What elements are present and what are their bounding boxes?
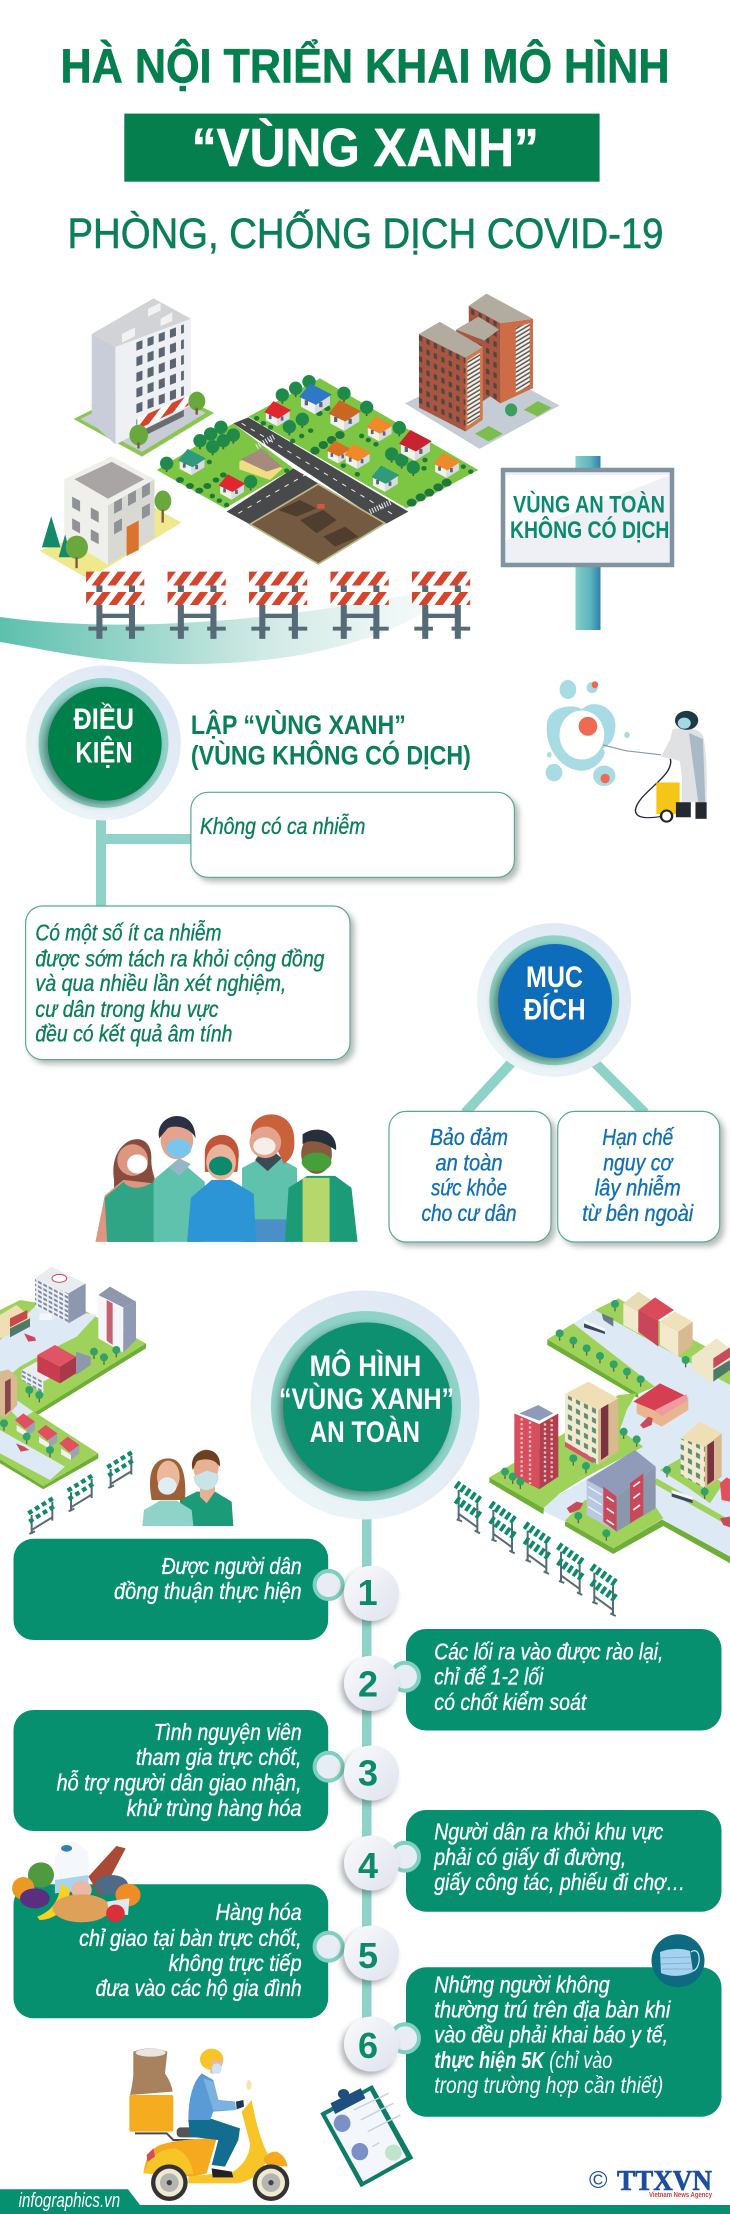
illustration: left isometric city xyxy=(0,1267,146,1489)
footer: infographics.vn xyxy=(0,2189,730,2214)
step 6: trong trường hợp cần thiết) xyxy=(434,2072,663,2098)
panel: few isolated cases: và qua nhiều lần xét nghiệm, xyxy=(35,970,286,996)
step 6: vào đều phải khai báo y tế, xyxy=(434,2022,668,2048)
step 1: 1 xyxy=(358,1572,378,1613)
sign: safe zone: KHÔNG CÓ DỊCH xyxy=(510,516,669,544)
panel: protect resident health: an toàn xyxy=(436,1149,502,1175)
circle: purpose xyxy=(465,923,645,1113)
panel: limit outside infection: từ bên ngoài xyxy=(582,1200,694,1226)
panel: limit outside infection: lây nhiễm xyxy=(595,1174,681,1201)
step 5 xyxy=(14,1884,399,2018)
illustration: lower city scene xyxy=(40,456,470,639)
logo: TTXVN: Vietnam News Agency xyxy=(649,2190,713,2199)
sign: safe zone xyxy=(503,456,672,630)
step 4: Người dân ra khỏi khu vực xyxy=(434,1818,664,1844)
sign: safe zone: VÙNG AN TOÀN xyxy=(513,491,665,519)
icon: left green barriers xyxy=(28,1451,135,1534)
step 3: tham gia trực chốt, xyxy=(136,1744,302,1770)
circle: conditions xyxy=(26,666,181,820)
title xyxy=(60,38,670,258)
icon: grey hotel building xyxy=(74,298,214,457)
circle: purpose: ĐÍCH xyxy=(524,993,586,1027)
step 2: 2 xyxy=(358,1664,378,1705)
icon: brick apartment towers xyxy=(405,294,560,449)
panel: few isolated cases: đều có kết quả âm tính xyxy=(35,1020,232,1046)
icon: delivery rider on yellow scooter xyxy=(129,2048,289,2201)
panel: no infections: Không có ca nhiễm xyxy=(200,812,365,839)
step 6: Những người không xyxy=(434,1972,610,1998)
heading: set up green zone: LẬP “VÙNG XANH” xyxy=(191,709,406,740)
step 4: 4 xyxy=(358,1845,378,1886)
step 2: Các lối ra vào được rào lại, xyxy=(434,1638,663,1664)
step 6: 6 xyxy=(358,2025,378,2066)
step 5: 5 xyxy=(358,1935,378,1976)
icon: beige low-rise building xyxy=(40,456,182,579)
icon: five road barricades xyxy=(86,572,470,639)
step 2 xyxy=(344,1629,722,1730)
panel: protect resident health: cho cư dân xyxy=(422,1200,516,1226)
step 3: Tình nguyện viên xyxy=(154,1719,302,1745)
step 4: phải có giấy đi đường, xyxy=(433,1844,626,1870)
panel: protect resident health xyxy=(389,1111,551,1242)
step 6: thực hiện 5K (chỉ vào xyxy=(434,2047,612,2073)
footer: infographics.vn: infographics.vn xyxy=(19,2190,120,2212)
step 3: khử trùng hàng hóa xyxy=(127,1795,302,1821)
circle: purpose: MỤC xyxy=(526,961,583,994)
circle: conditions: KIỆN xyxy=(75,736,133,770)
circle: safe green-zone model xyxy=(250,1290,480,1520)
panel: few isolated cases: được sớm tách ra khỏi cộng đồng xyxy=(35,945,325,971)
step 5: chỉ giao tại bàn trực chốt, xyxy=(79,1925,302,1951)
logo: TTXVN: © xyxy=(589,2167,608,2194)
icon: disinfection worker spraying virus xyxy=(546,680,707,822)
icon: face mask badge xyxy=(652,1934,704,1987)
step 6: thường trú trên địa bàn khi xyxy=(434,1997,671,2023)
step 2: có chốt kiểm soát xyxy=(434,1689,588,1715)
panel: no infections xyxy=(191,792,514,877)
step 6 xyxy=(344,1967,722,2117)
panel: limit outside infection: Hạn chế xyxy=(602,1124,675,1150)
step 1: đồng thuận thực hiện xyxy=(114,1578,302,1604)
connector: model timeline xyxy=(362,1500,372,2020)
step 1 xyxy=(14,1539,399,1640)
heading: set up green zone: (VÙNG KHÔNG CÓ DỊCH) xyxy=(191,740,471,771)
icon: five people wearing masks xyxy=(95,1114,358,1242)
circle: safe green-zone model: AN TOÀN xyxy=(310,1415,420,1449)
step 2: chỉ để 1-2 lối xyxy=(434,1663,544,1689)
step 5: Hàng hóa xyxy=(216,1899,302,1925)
heading: set up green zone xyxy=(191,709,471,771)
icon: groceries xyxy=(12,1841,141,1922)
icon: neighbourhood with houses and roads xyxy=(157,375,478,564)
panel: limit outside infection xyxy=(558,1111,720,1242)
step 1: Được người dân xyxy=(162,1553,302,1579)
illustration: right isometric city xyxy=(489,1292,730,1563)
circle: safe green-zone model: “VÙNG XANH” xyxy=(279,1382,454,1416)
panel: protect resident health: sức khỏe xyxy=(431,1175,507,1201)
step 3 xyxy=(14,1710,399,1831)
circle: conditions: ĐIỀU xyxy=(74,702,134,736)
step 4 xyxy=(344,1810,722,1912)
step 5: đưa vào các hộ gia đình xyxy=(96,1975,302,2001)
step 4: giấy công tác, phiếu đi chợ… xyxy=(434,1869,685,1895)
panel: few isolated cases: Có một số ít ca nhiễm xyxy=(35,919,221,946)
icon: right green barriers xyxy=(456,1484,616,1616)
icon: medical clipboard xyxy=(320,2085,413,2187)
title: HÀ NỘI TRIỂN KHAI MÔ HÌNH xyxy=(60,38,670,94)
panel: few isolated cases xyxy=(26,906,350,1060)
step 3: hỗ trợ người dân giao nhận, xyxy=(57,1769,302,1796)
panel: few isolated cases: cư dân trong khu vực xyxy=(35,996,219,1022)
title: “VÙNG XANH” xyxy=(192,118,539,178)
illustration: city scene xyxy=(74,294,560,457)
panel: limit outside infection: nguy cơ xyxy=(603,1149,674,1175)
icon: couple wearing masks xyxy=(142,1449,233,1526)
logo: TTXVN: TTXVN xyxy=(617,2166,712,2197)
swoosh band xyxy=(0,582,470,664)
step 5: không trực tiếp xyxy=(169,1950,302,1976)
step 3: 3 xyxy=(358,1753,378,1794)
circle: safe green-zone model: MÔ HÌNH xyxy=(310,1349,421,1383)
title: PHÒNG, CHỐNG DỊCH COVID-19 xyxy=(68,209,664,258)
panel: protect resident health: Bảo đảm xyxy=(430,1124,508,1150)
connector: conditions xyxy=(101,800,192,910)
